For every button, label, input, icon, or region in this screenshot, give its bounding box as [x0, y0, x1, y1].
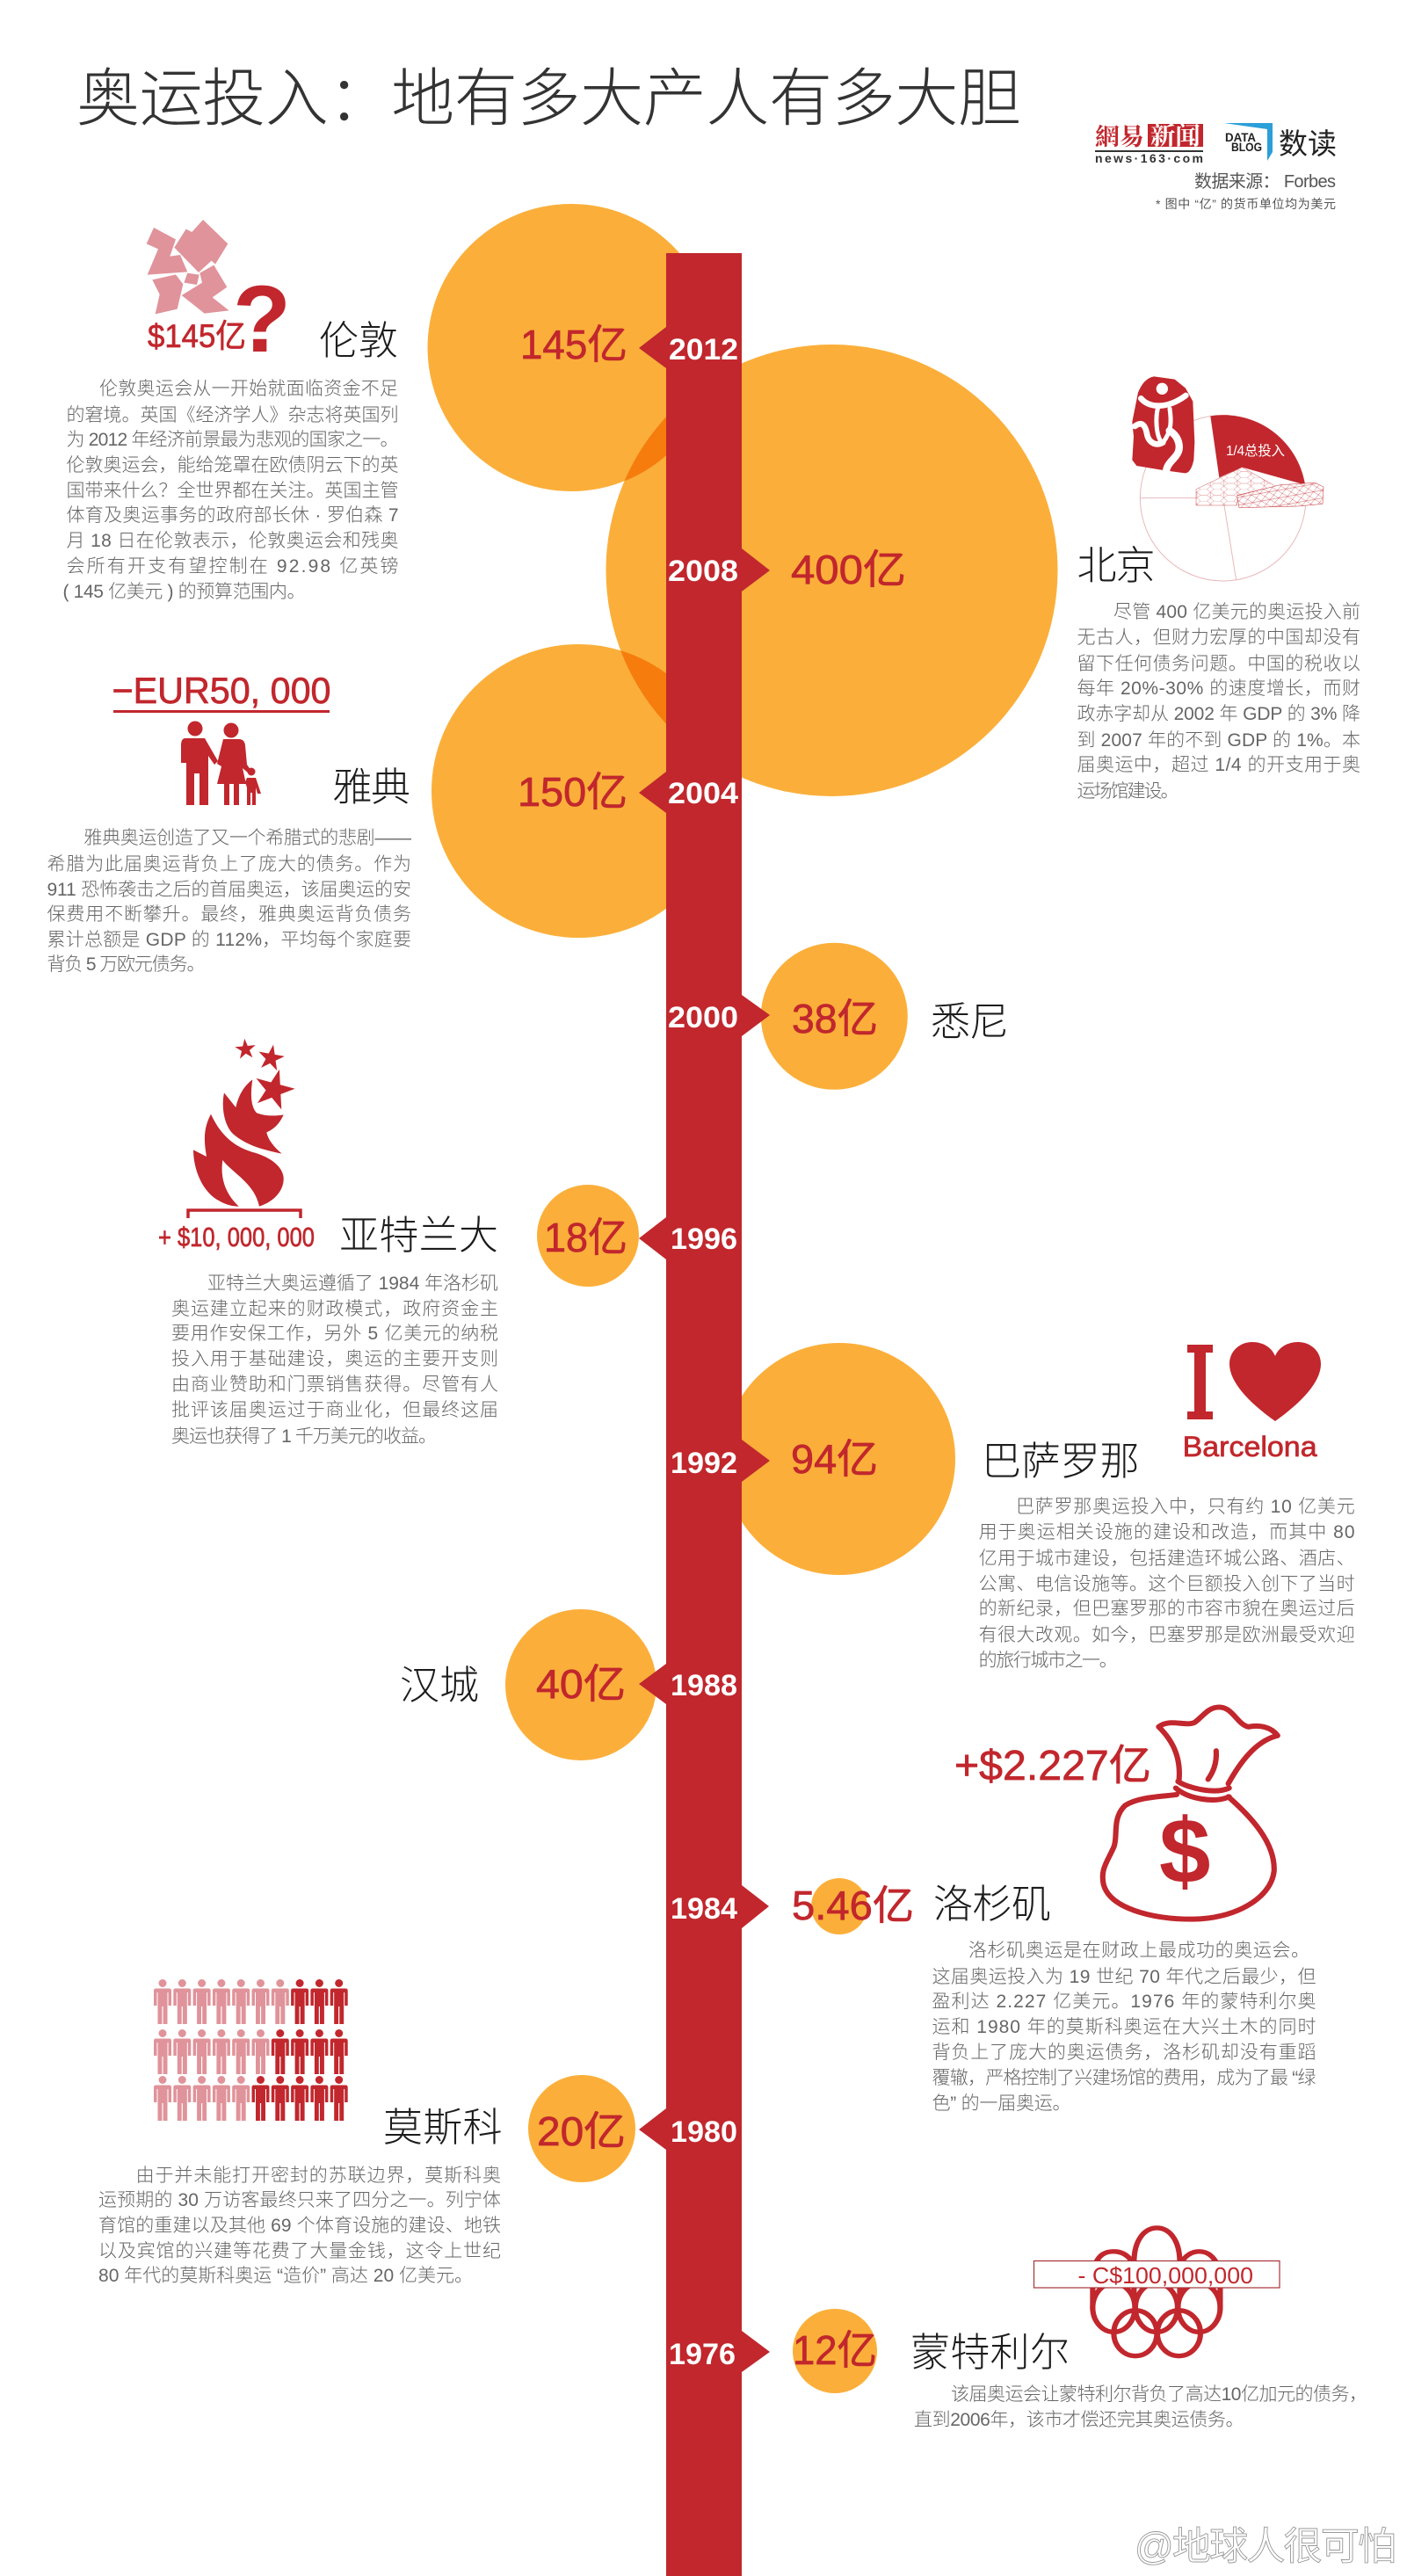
- arrow: 1976: [742, 2331, 770, 2372]
- year: 2008: 2008: [668, 555, 738, 588]
- year: 1992: 1992: [671, 1447, 737, 1480]
- text: Moscow: 育馆的重建以及其他 69 个体育设施的建设、地铁: [98, 2216, 501, 2236]
- text: Atlanta: 亚特兰大奥运遵循了 1984 年洛杉矶: [207, 1273, 498, 1294]
- value: 12亿: 12亿: [793, 2327, 877, 2373]
- arrow: 1992: [742, 1440, 770, 1482]
- currency note: * 图中 “亿” 的货币单位均为美元: [1156, 197, 1336, 211]
- title: 奥运投入：地有多大产人有多大胆: [76, 64, 1021, 134]
- heading: Atlanta: 亚特兰大: [339, 1213, 498, 1258]
- text: Moscow: [98, 2166, 501, 2286]
- panel: Moscow: [98, 1979, 503, 2286]
- text: Los Angeles: 盈利达 2.227 亿美元。1976 年的蒙特利尔奥: [932, 1992, 1316, 2012]
- panel: Beijing: [1077, 376, 1360, 802]
- underline: [113, 710, 330, 713]
- arrow: 1984: [742, 1885, 769, 1928]
- text: London: 伦敦奥运会从一开始就面临资金不足: [99, 379, 398, 399]
- text: Athens: 希腊为此届奥运背负上了庞大的债务。作为: [47, 854, 411, 874]
- heading: Barcelona: 巴萨罗那: [982, 1439, 1139, 1484]
- panel: Atlanta: [158, 1038, 498, 1447]
- logo: Data Blog: 数读: [1279, 127, 1337, 160]
- year labels: [668, 333, 738, 2371]
- text: Beijing: 尽管 400 亿美元的奥运投入前: [1113, 602, 1360, 622]
- logo: NetEase News: 新闻: [1150, 117, 1200, 152]
- timeline axis: [666, 253, 742, 2576]
- text: Atlanta: [171, 1273, 498, 1447]
- pie chart outline: [1140, 415, 1306, 581]
- text: London: 为 2012 年经济前景最为悲观的国家之一。: [67, 430, 399, 450]
- text: Montreal: [914, 2384, 1367, 2430]
- value: 145亿: 145亿: [520, 322, 627, 367]
- pie wedge: quarter of investment: [1210, 415, 1305, 485]
- heading: Moscow: 莫斯科: [383, 2105, 503, 2150]
- pie label: 1/4总投入: [1226, 443, 1285, 459]
- icon: people grid: [154, 1979, 348, 2121]
- pie chart with stadium and emblem: [1132, 376, 1324, 581]
- text: London: 伦敦奥运会，能给笼罩在欧债阴云下的英: [67, 455, 399, 475]
- value: 94亿: 94亿: [791, 1436, 878, 1482]
- panel: Los Angeles: [932, 1707, 1316, 2114]
- logo: NetEase News: 網易: [1095, 118, 1144, 152]
- text: London: [63, 379, 399, 602]
- text: Atlanta: 奥运也获得了 1 千万美元的收益。: [171, 1426, 437, 1447]
- arrow: 1980: [639, 2108, 666, 2150]
- year: 1980: 1980: [671, 2115, 737, 2149]
- logo: Data Blog: [1224, 123, 1337, 161]
- text: Moscow: 由于并未能打开密封的苏联边界，莫斯科奥: [136, 2166, 501, 2186]
- value: 5.46亿: 5.46亿: [792, 1883, 914, 1928]
- publisher logos and source: [1095, 117, 1337, 211]
- year: 2000: 2000: [668, 1001, 738, 1034]
- Los Angeles profit: +$2.227亿: [954, 1743, 1151, 1789]
- panel: Barcelona: [979, 1342, 1355, 1671]
- circle: 2004: [432, 644, 725, 938]
- Montreal debt: - C$100,000,000: [1077, 2262, 1253, 2289]
- text: Athens: 雅典奥运创造了又一个希腊式的悲剧——: [83, 828, 411, 848]
- icon: London 2012 logo: [147, 220, 229, 314]
- text: Athens: 背负 5 万欧元债务。: [47, 954, 206, 975]
- text: Los Angeles: 这届奥运投入为 19 世纪 70 年代之后最少，但: [932, 1967, 1316, 1987]
- arrow: 2000: [742, 995, 770, 1036]
- icon: question mark: ?: [233, 265, 291, 372]
- heading: Los Angeles: 洛杉矶: [933, 1882, 1051, 1927]
- text: Atlanta: 投入用于基础建设，奥运的主要开支则: [171, 1349, 498, 1369]
- Barcelona wordmark: Barcelona: [1183, 1431, 1317, 1462]
- text: Athens: 累计总额是 GDP 的 112%，平均每个家庭要: [47, 930, 411, 950]
- data source: 数据来源： Forbes: [1194, 171, 1336, 192]
- logo: NetEase News: [1095, 117, 1203, 165]
- text: London: 体育及奥运事务的政府部长休 · 罗伯森 7: [67, 505, 399, 526]
- arrow: 2008: [742, 548, 770, 591]
- text: Barcelona: 有很大改观。如今，巴塞罗那是欧洲最受欢迎: [979, 1625, 1355, 1645]
- circle: 2008: [606, 345, 1058, 796]
- text: London: 会所有开支有望控制在 92.98 亿英镑: [67, 556, 399, 577]
- circle: 1976: [793, 2309, 877, 2393]
- text: London: 国带来什么？全世界都在关注。英国主管: [67, 481, 399, 501]
- text: Los Angeles: 背负上了庞大的奥运债务，洛杉矶却没有重蹈: [932, 2043, 1316, 2063]
- text: London: ( 145 亿美元 ) 的预算范围内。: [63, 582, 306, 602]
- Atlanta profit: + $10, 000, 000: [158, 1222, 315, 1252]
- text: Beijing: 留下任何债务问题。中国的税收以: [1077, 654, 1360, 674]
- investment values: [518, 322, 914, 2373]
- text: Beijing: 无古人，但财力宏厚的中国却没有: [1077, 628, 1360, 648]
- icon: family: [181, 721, 261, 805]
- text: Atlanta: 批评该届奥运过于商业化，但最终这届: [171, 1400, 498, 1420]
- text: Moscow: 以及宾馆的兴建等花费了大量金钱，这令上世纪: [98, 2241, 501, 2261]
- heading: Seoul: 汉城: [400, 1663, 479, 1708]
- heading: Sydney: 悉尼: [931, 999, 1009, 1044]
- text: Montreal: 直到2006年，该市才偿还完其奥运债务。: [914, 2410, 1244, 2430]
- year: 1996: 1996: [671, 1223, 737, 1256]
- year: 2012: 2012: [669, 333, 738, 366]
- panel: Montreal: [910, 2228, 1367, 2430]
- circle: 1988: [505, 1609, 656, 1760]
- icon: Bird's Nest stadium: [1196, 468, 1324, 508]
- text: Barcelona: 的旅行城市之一。: [979, 1651, 1118, 1671]
- icon: money bag: $: [1159, 1800, 1210, 1903]
- text: Moscow: 运预期的 30 万访客最终只来了四分之一。列宁体: [98, 2190, 501, 2210]
- text: Barcelona: 的新纪录，但巴塞罗那的市容市貌在奥运过后: [979, 1599, 1355, 1619]
- text: Beijing: 每年 20%-30% 的速度增长，而财: [1077, 678, 1360, 699]
- year: 1988: 1988: [671, 1669, 737, 1702]
- investment circles: [427, 204, 1058, 2393]
- panel: Athens: [47, 670, 411, 975]
- circle overlap: 2004 and 2008: [620, 650, 666, 724]
- circle: 1992: [723, 1343, 955, 1575]
- year: 1976: 1976: [669, 2338, 736, 2371]
- text: Athens: 911 恐怖袭击之后的首届奥运，该届奥运的安: [47, 880, 411, 900]
- value: 400亿: 400亿: [791, 547, 906, 592]
- text: Los Angeles: 色” 的一届奥运。: [932, 2093, 1070, 2114]
- text: Beijing: 届奥运中，超过 1/4 的开支用于奥: [1077, 755, 1360, 775]
- text: Los Angeles: [932, 1941, 1316, 2114]
- text: Beijing: 政赤字却从 2002 年 GDP 的 3% 降: [1077, 704, 1360, 724]
- text: Athens: [47, 828, 411, 975]
- text: Atlanta: 由商业赞助和门票销售获得。尽管有人: [171, 1375, 498, 1395]
- icon: Atlanta torch: [193, 1038, 299, 1207]
- text: Los Angeles: 洛杉矶奥运是在财政上最成功的奥运会。: [968, 1941, 1309, 1961]
- icon: Montreal rings logo: [1092, 2228, 1220, 2356]
- panel: London: [63, 220, 399, 602]
- watermark: @地球人很可怕: [1135, 2525, 1396, 2568]
- text: London: 的窘境。英国《经济学人》杂志将英国列: [67, 405, 399, 425]
- Athens debt per family: −EUR50, 000: [112, 670, 330, 711]
- arrow: 1988: [639, 1664, 666, 1704]
- text: Moscow: 80 年代的莫斯科奥运 “造价” 高达 20 亿美元。: [98, 2266, 473, 2286]
- logo: NetEase News: news·163·com: [1095, 151, 1203, 165]
- heading: London: 伦敦: [319, 318, 398, 363]
- circle: 2000: [761, 943, 908, 1090]
- heading: Beijing: 北京: [1077, 543, 1155, 588]
- year: 1984: 1984: [671, 1892, 737, 1926]
- text: Barcelona: 亿用于城市建设，包括建造环城公路、酒店、: [979, 1549, 1355, 1569]
- circle: 1984: [811, 1878, 867, 1934]
- bracket: [188, 1210, 301, 1218]
- icon: I love Barcelona: [1187, 1342, 1321, 1421]
- arrow: 2012: [639, 327, 666, 368]
- logo: Data Blog: DATA: [1225, 130, 1256, 144]
- text: Montreal: 该届奥运会让蒙特利尔背负了高达10亿加元的债务，: [951, 2384, 1367, 2405]
- text: Barcelona: 公寓、电信设施等。这个巨额投入创下了当时: [979, 1574, 1355, 1594]
- heading: Athens: 雅典: [332, 765, 410, 809]
- timeline arrows: [639, 327, 770, 2372]
- icon: Beijing 2008 emblem: [1132, 376, 1194, 473]
- circle: 2012: [427, 204, 715, 491]
- text: London: 月 18 日在伦敦表示，伦敦奥运会和残奥: [67, 531, 399, 551]
- London cost: $145亿: [148, 318, 246, 354]
- value: 38亿: 38亿: [792, 996, 878, 1041]
- arrow: 1996: [639, 1217, 666, 1259]
- heading: Montreal: 蒙特利尔: [910, 2330, 1070, 2375]
- year: 2004: 2004: [668, 777, 738, 810]
- Montreal debt box: [1033, 2260, 1280, 2288]
- text: Barcelona: 巴萨罗那奥运投入中，只有约 10 亿美元: [1016, 1497, 1355, 1517]
- text: Atlanta: 奥运建立起来的财政模式，政府资金主: [171, 1299, 498, 1319]
- value: 18亿: 18亿: [544, 1215, 627, 1260]
- text: Athens: 保费用不断攀升。最终，雅典奥运背负债务: [47, 904, 411, 925]
- value: 150亿: 150亿: [518, 769, 627, 815]
- circle: 1980: [528, 2075, 635, 2182]
- text: Los Angeles: 运和 1980 年的莫斯科奥运在大兴土木的同时: [932, 2017, 1316, 2037]
- value: 40亿: 40亿: [536, 1661, 626, 1707]
- text: Los Angeles: 覆辙，严格控制了兴建场馆的费用，成为了最 “绿: [932, 2068, 1316, 2088]
- logo: Data Blog: BLOG: [1231, 140, 1262, 154]
- value: 20亿: 20亿: [537, 2108, 626, 2154]
- circle overlap: 2012 and 2008: [624, 417, 666, 482]
- arrow: 2004: [639, 772, 666, 813]
- text: Beijing: [1077, 602, 1360, 802]
- text: Barcelona: [979, 1497, 1355, 1671]
- text: Atlanta: 要用作安保工作，另外 5 亿美元的纳税: [171, 1324, 498, 1344]
- circle: 1996: [537, 1185, 639, 1287]
- text: Beijing: 到 2007 年的不到 GDP 的 1%。本: [1077, 730, 1360, 751]
- text: Barcelona: 用于奥运相关设施的建设和改造，而其中 80: [979, 1522, 1355, 1542]
- icon: money bag: [1103, 1707, 1278, 1919]
- text: Beijing: 运场馆建设。: [1077, 781, 1179, 802]
